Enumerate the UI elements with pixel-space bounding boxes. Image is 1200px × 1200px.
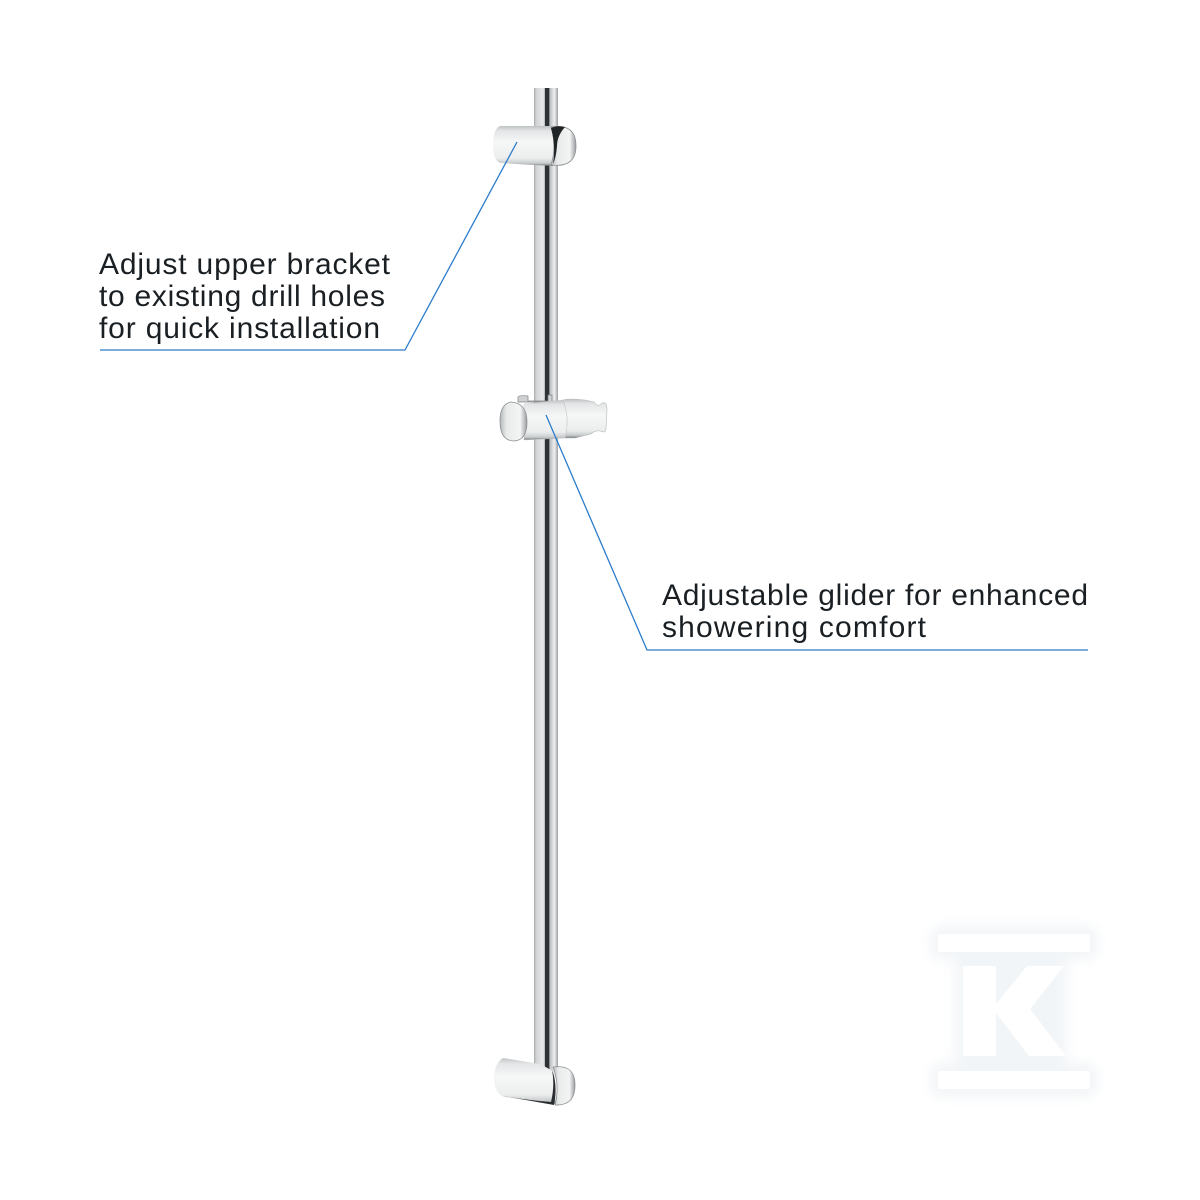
callout text: to existing drill holes	[99, 280, 385, 313]
callout leader line	[546, 415, 1088, 650]
shower rail rod	[534, 88, 558, 1078]
callout text: Adjust upper bracket	[99, 248, 391, 281]
glider	[500, 395, 607, 441]
callout text: Adjustable glider for enhanced	[662, 579, 1088, 612]
callout: upper bracket	[99, 142, 517, 350]
callout text	[99, 248, 391, 345]
lower bracket	[494, 1058, 575, 1105]
upper bracket	[493, 126, 576, 166]
glider cap	[500, 402, 527, 441]
callout text: showering comfort	[662, 611, 927, 644]
callout text	[662, 579, 1088, 644]
glider clip and button	[518, 395, 552, 402]
glider holder head	[563, 399, 607, 438]
callout: glider	[546, 415, 1088, 650]
callout text: for quick installation	[99, 312, 380, 345]
callout leader line	[100, 142, 517, 350]
glider body	[524, 400, 567, 440]
watermark logo	[930, 926, 1098, 1097]
